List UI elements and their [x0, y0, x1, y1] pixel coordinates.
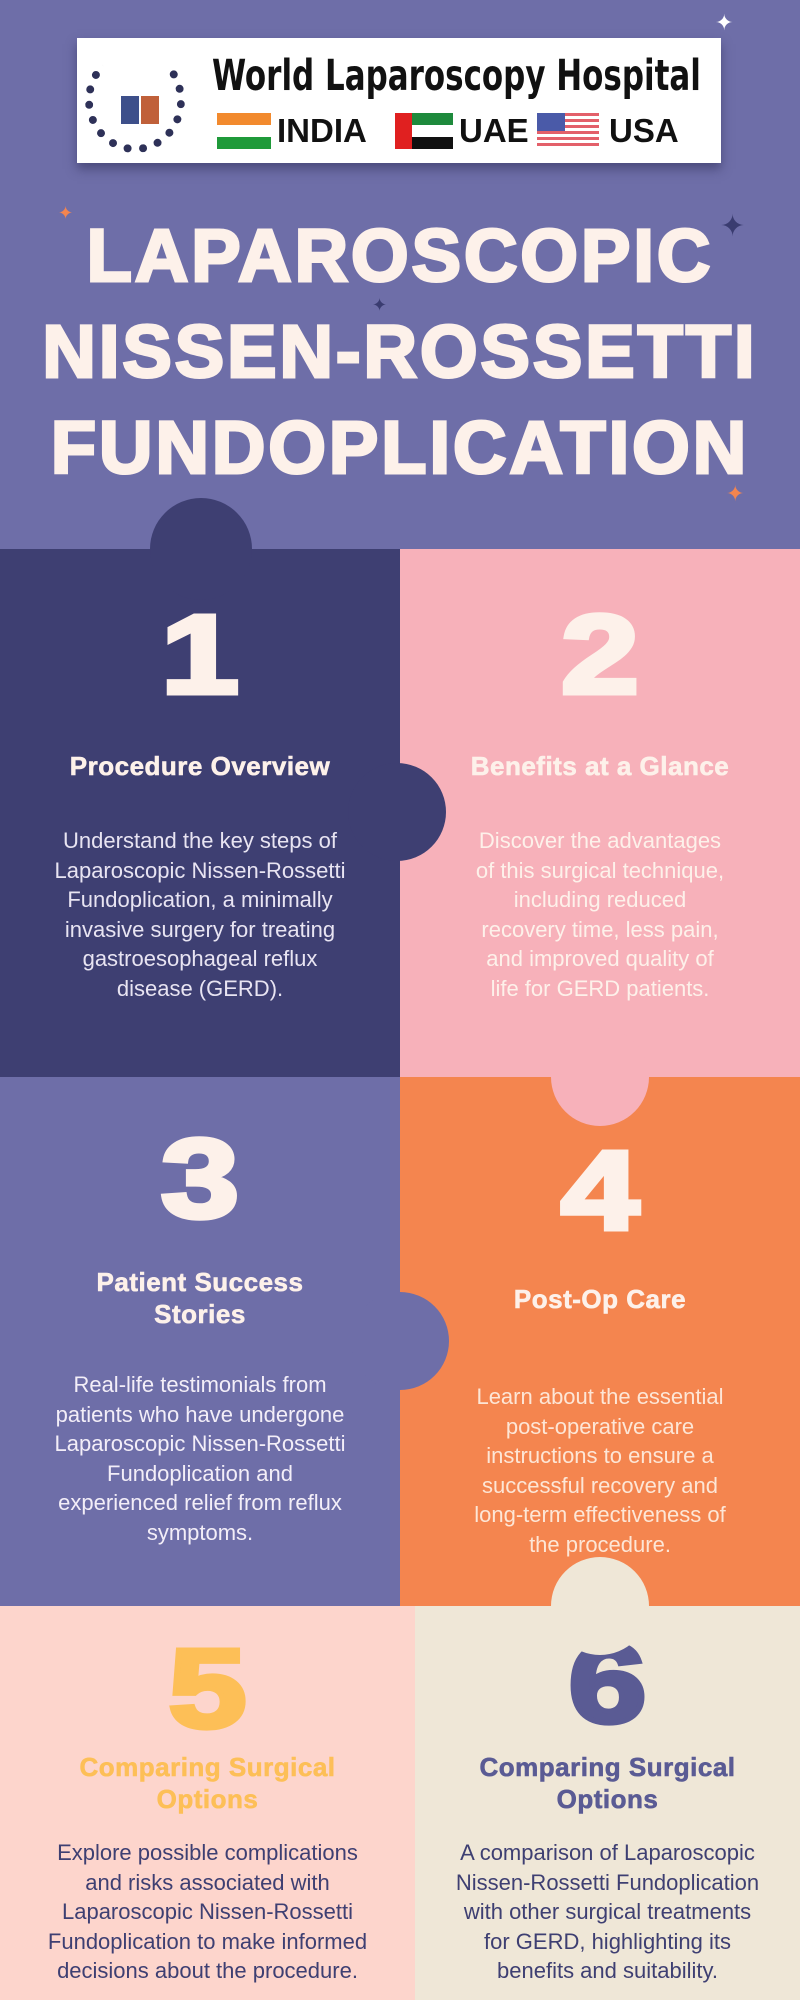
text: Real-life testimonials from — [73, 1372, 327, 1397]
heading: Options — [157, 1784, 258, 1814]
text: post-operative care — [506, 1414, 694, 1438]
icon: laurel emblem — [85, 48, 185, 153]
text: Discover the advantages — [479, 828, 721, 853]
puzzle tab: top — [150, 498, 252, 600]
heading: Comparing Surgical — [479, 1752, 736, 1782]
text — [474, 1384, 726, 1556]
title: FUNDOPLICATION — [51, 406, 749, 489]
text: Fundoplication and — [107, 1460, 293, 1486]
text: recovery time, less pain, — [481, 916, 719, 942]
text — [54, 1372, 346, 1544]
puzzle tab: panel3 right — [351, 1292, 449, 1390]
text: Laparoscopic Nissen-Rossetti — [54, 858, 346, 882]
text: decisions about the procedure. — [57, 1958, 358, 1983]
title — [42, 214, 758, 489]
text: successful recovery and — [482, 1472, 718, 1498]
number 5: 5 — [169, 1626, 246, 1751]
text — [54, 828, 346, 1000]
puzzle tab: panel6 top — [551, 1557, 649, 1655]
text: benefits and suitability. — [497, 1958, 718, 1983]
text: including reduced — [514, 887, 686, 912]
text: ✦ — [726, 481, 744, 506]
heading — [479, 1752, 736, 1814]
number 4: 4 — [561, 1128, 639, 1253]
flags row: UAE — [459, 112, 529, 149]
text: symptoms. — [147, 1520, 253, 1544]
panel 2 — [400, 549, 800, 1077]
text: ✦ — [720, 210, 745, 243]
hospital name: World Laparoscopy Hospital — [212, 51, 701, 101]
text: instructions to ensure a — [486, 1443, 714, 1468]
text: disease (GERD). — [117, 976, 283, 1000]
heading: Comparing Surgical — [79, 1752, 336, 1782]
text: the procedure. — [529, 1532, 671, 1556]
number 1: 1 — [161, 592, 239, 717]
number 6: 6 — [569, 1621, 646, 1746]
text: long-term effectiveness of — [474, 1502, 726, 1527]
flags row: INDIA — [277, 112, 367, 149]
number 3: 3 — [161, 1116, 239, 1241]
heading: Post-Op Care — [514, 1284, 686, 1314]
text — [476, 828, 724, 1000]
text: Nissen-Rossetti Fundoplication — [456, 1870, 759, 1894]
text: gastroesophageal reflux — [83, 946, 317, 971]
heading: Benefits at a Glance — [471, 751, 729, 781]
text: Laparoscopic Nissen-Rossetti — [54, 1431, 346, 1456]
text: Laparoscopic Nissen-Rossetti — [62, 1899, 353, 1924]
text: patients who have undergone — [56, 1402, 344, 1426]
logo banner — [77, 38, 721, 163]
text: ✦ — [58, 203, 73, 223]
text: Understand the key steps of — [63, 828, 337, 853]
flags row: USA — [609, 112, 679, 149]
panel 4 — [400, 1077, 800, 1606]
heading: Procedure Overview — [70, 751, 330, 781]
text: Learn about the essential — [476, 1384, 724, 1409]
panel 5 — [0, 1606, 415, 2000]
heading: Options — [557, 1784, 658, 1814]
text: A comparison of Laparoscopic — [460, 1840, 755, 1865]
text: and risks associated with — [85, 1870, 330, 1894]
title: NISSEN-ROSSETTI — [42, 310, 758, 393]
heading: Patient Success — [97, 1267, 303, 1297]
number 2: 2 — [561, 592, 639, 717]
text: experienced relief from reflux — [58, 1490, 342, 1515]
puzzle tab: panel2 bottom — [551, 1028, 649, 1126]
text: invasive surgery for treating — [65, 916, 335, 942]
panel 3 — [0, 1077, 400, 1606]
text: of this surgical technique, — [476, 858, 724, 882]
heading — [97, 1267, 303, 1329]
text: with other surgical treatments — [464, 1899, 751, 1924]
decorative stars: ✦ — [715, 10, 733, 35]
panel 1 — [0, 549, 400, 1077]
text — [456, 1840, 759, 1983]
flags row — [217, 112, 679, 149]
heading: Stories — [154, 1299, 246, 1329]
text: Fundoplication to make informed — [48, 1928, 367, 1954]
text: Fundoplication, a minimally — [67, 887, 333, 912]
text: and improved quality of — [486, 946, 714, 971]
text: ✦ — [372, 295, 387, 315]
text: for GERD, highlighting its — [484, 1928, 731, 1954]
text: life for GERD patients. — [491, 976, 709, 1000]
heading — [79, 1752, 336, 1814]
text — [48, 1840, 367, 1983]
puzzle tab: panel1 right — [348, 763, 446, 861]
text: Explore possible complications — [57, 1840, 358, 1865]
title: LAPAROSCOPIC — [87, 214, 713, 297]
panel 6 — [415, 1606, 800, 2000]
